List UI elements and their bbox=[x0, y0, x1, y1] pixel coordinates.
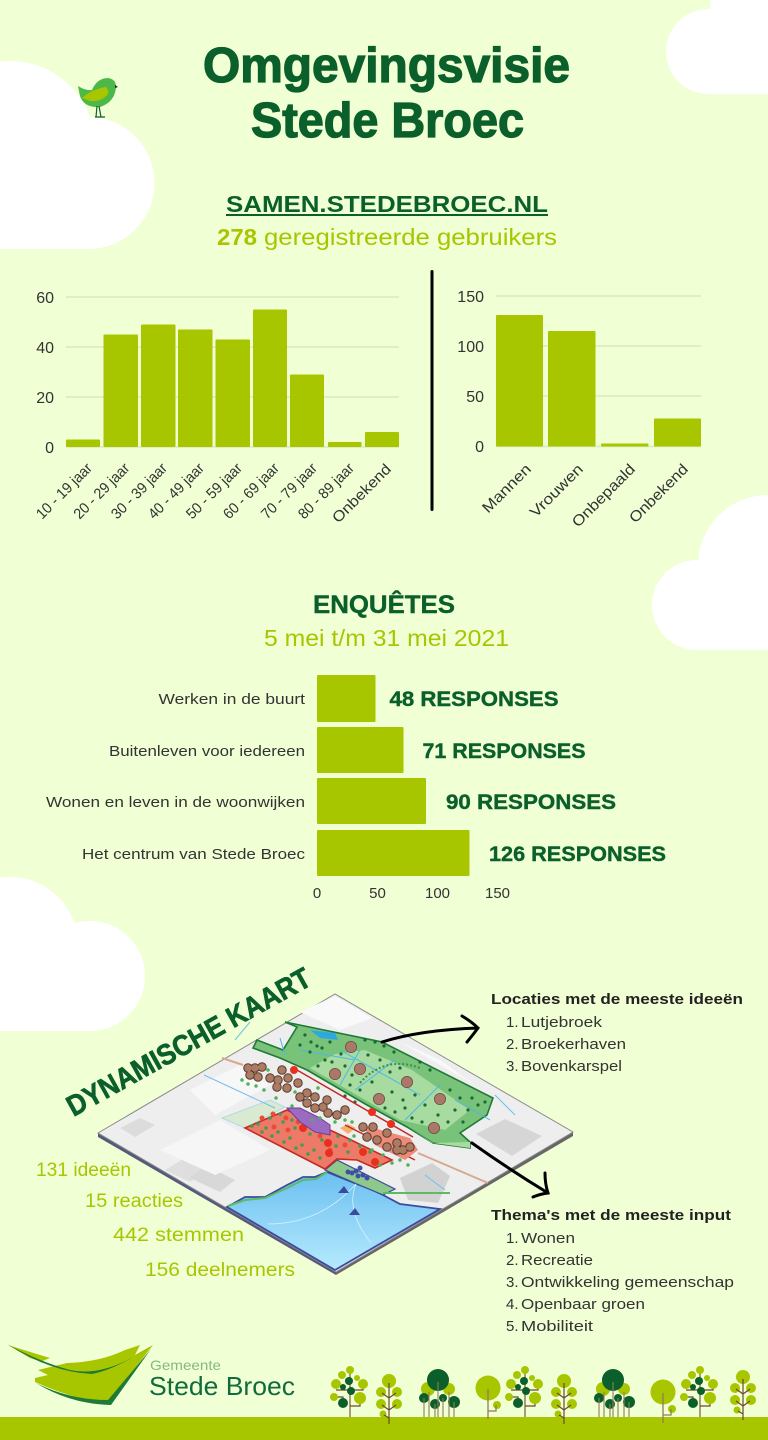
title bbox=[203, 39, 570, 148]
list: locations: Bovenkarspel bbox=[521, 1058, 622, 1075]
bar chart: age groups: 20 - 29 jaar bbox=[70, 460, 133, 523]
bar chart: gender: Vrouwen bbox=[527, 461, 587, 521]
tree 4 bbox=[476, 1376, 501, 1419]
map terrain patches bbox=[120, 996, 542, 1203]
registered users line: 278 bbox=[217, 224, 257, 250]
cloud: middle right bbox=[652, 495, 768, 650]
logo: Gemeente Stede Broec: Stede Broec bbox=[149, 1371, 295, 1401]
list: themes: 3. bbox=[506, 1274, 519, 1291]
map statistics bbox=[36, 1160, 295, 1281]
bar chart: gender bbox=[457, 289, 701, 531]
map statistics: 131 ideeën bbox=[36, 1160, 131, 1181]
bar chart: age groups: 70 - 79 jaar bbox=[258, 460, 321, 523]
list: themes: Wonen bbox=[521, 1230, 575, 1247]
list: locations: 3. bbox=[506, 1058, 519, 1075]
survey heading: ENQUÊTES bbox=[313, 589, 455, 619]
bar chart: gender: Onbepaald bbox=[569, 461, 639, 531]
bar chart: age groups: 40 - 49 jaar bbox=[145, 460, 208, 523]
green zone bbox=[253, 1022, 493, 1148]
tree 5 bbox=[505, 1366, 543, 1417]
bar chart: survey responses: 0 bbox=[313, 885, 321, 902]
bar chart: survey responses: 126 RESPONSES bbox=[489, 843, 666, 866]
tree 2 bbox=[376, 1374, 402, 1424]
list: locations: Lutjebroek bbox=[521, 1014, 603, 1031]
list: themes: 2. bbox=[506, 1252, 519, 1269]
bar chart: gender: 150 bbox=[457, 289, 484, 306]
list: themes bbox=[491, 1207, 734, 1335]
bar chart: gender: 100 bbox=[457, 339, 484, 356]
bar chart: age groups: 10 - 19 jaar bbox=[33, 460, 96, 523]
arrow: to themes bbox=[472, 1143, 548, 1197]
bar chart: gender: 50 bbox=[466, 389, 484, 406]
cloud: lower left bbox=[0, 877, 145, 1031]
list: themes: Mobiliteit bbox=[521, 1318, 594, 1335]
bar chart: survey responses: 50 bbox=[369, 885, 386, 902]
tree 9 bbox=[680, 1366, 718, 1417]
survey heading bbox=[264, 589, 509, 651]
bar chart: age groups: 50 - 59 jaar bbox=[183, 460, 246, 523]
tree 3 bbox=[419, 1369, 460, 1417]
map statistics: 156 deelnemers bbox=[145, 1260, 295, 1281]
cloud: top left bbox=[0, 61, 154, 249]
survey heading: 5 mei t/m 31 mei 2021 bbox=[264, 625, 509, 651]
map statistics: 15 reacties bbox=[85, 1191, 183, 1212]
red zone bbox=[245, 1108, 392, 1169]
tree 8 bbox=[650, 1380, 676, 1423]
bar chart: age groups bbox=[33, 290, 399, 527]
ground strip bbox=[0, 1417, 768, 1440]
registered users line: geregistreerde gebruikers bbox=[264, 224, 557, 250]
divider line between charts bbox=[430, 270, 434, 511]
bar chart: age groups: 60 - 69 jaar bbox=[220, 460, 283, 523]
icon: green bird bbox=[78, 78, 118, 117]
tree row bbox=[330, 1366, 756, 1424]
map base bbox=[98, 1133, 336, 1275]
bar chart: survey responses: 90 RESPONSES bbox=[446, 791, 616, 814]
tree 6 bbox=[551, 1374, 577, 1424]
logo: Gemeente Stede Broec bbox=[7, 1344, 295, 1405]
bar chart: age groups: 60 bbox=[36, 290, 54, 307]
list: themes: 1. bbox=[506, 1230, 519, 1247]
list: locations bbox=[491, 991, 743, 1075]
bar chart: age groups: 0 bbox=[45, 440, 54, 457]
list: themes: Recreatie bbox=[521, 1252, 593, 1269]
bar chart: survey responses: Wonen en leven in de woonwijken bbox=[46, 794, 305, 811]
bar chart: survey responses: 48 RESPONSES bbox=[390, 688, 558, 711]
bar chart: age groups: Onbekend bbox=[329, 461, 395, 527]
list: themes: 5. bbox=[506, 1318, 519, 1335]
bar chart: gender: Mannen bbox=[479, 461, 535, 517]
bar chart: gender: 0 bbox=[475, 439, 484, 456]
map statistics: 442 stemmen bbox=[113, 1225, 244, 1246]
list: locations: Broekerhaven bbox=[521, 1036, 626, 1053]
list: locations: Locaties met de meeste ideeën bbox=[491, 991, 743, 1008]
bar chart: survey responses: 71 RESPONSES bbox=[422, 740, 586, 763]
tree 10 bbox=[730, 1370, 756, 1420]
arrow: to locations bbox=[382, 1016, 478, 1042]
list: locations: 1. bbox=[506, 1014, 519, 1031]
map heading: DYNAMISCHE KAART bbox=[61, 962, 317, 1123]
isometric map bbox=[98, 994, 573, 1275]
bar chart: survey responses: 100 bbox=[425, 885, 450, 902]
list: themes: 4. bbox=[506, 1296, 519, 1313]
logo: Gemeente Stede Broec: Gemeente bbox=[150, 1357, 221, 1373]
title: Omgevingsvisie bbox=[203, 39, 570, 93]
bar chart: survey responses: 150 bbox=[485, 885, 510, 902]
list: themes: Thema's met de meeste input bbox=[491, 1207, 731, 1224]
cloud: top right bbox=[666, 0, 768, 94]
bar chart: survey responses: Werken in de buurt bbox=[158, 691, 306, 708]
website heading: SAMEN.STEDEBROEC.NL bbox=[226, 191, 548, 217]
bar chart: survey responses: Buitenleven voor iedereen bbox=[109, 743, 305, 760]
list: themes: Openbaar groen bbox=[521, 1296, 645, 1313]
list: themes: Ontwikkeling gemeenschap bbox=[521, 1274, 734, 1291]
tree 1 bbox=[330, 1366, 368, 1417]
bar chart: survey responses: Het centrum van Stede Broec bbox=[82, 846, 306, 863]
bar chart: age groups: 80 - 89 jaar bbox=[295, 460, 358, 523]
bar chart: survey responses bbox=[46, 675, 666, 902]
bar chart: age groups: 40 bbox=[36, 340, 54, 357]
housing strip bbox=[242, 1067, 418, 1165]
title: Stede Broec bbox=[251, 94, 524, 148]
list: locations: 2. bbox=[506, 1036, 519, 1053]
bar chart: age groups: 30 - 39 jaar bbox=[108, 460, 171, 523]
bar chart: age groups: 20 bbox=[36, 390, 54, 407]
lake bbox=[227, 1160, 450, 1270]
tree 7 bbox=[594, 1369, 635, 1417]
bar chart: gender: Onbekend bbox=[626, 461, 692, 527]
